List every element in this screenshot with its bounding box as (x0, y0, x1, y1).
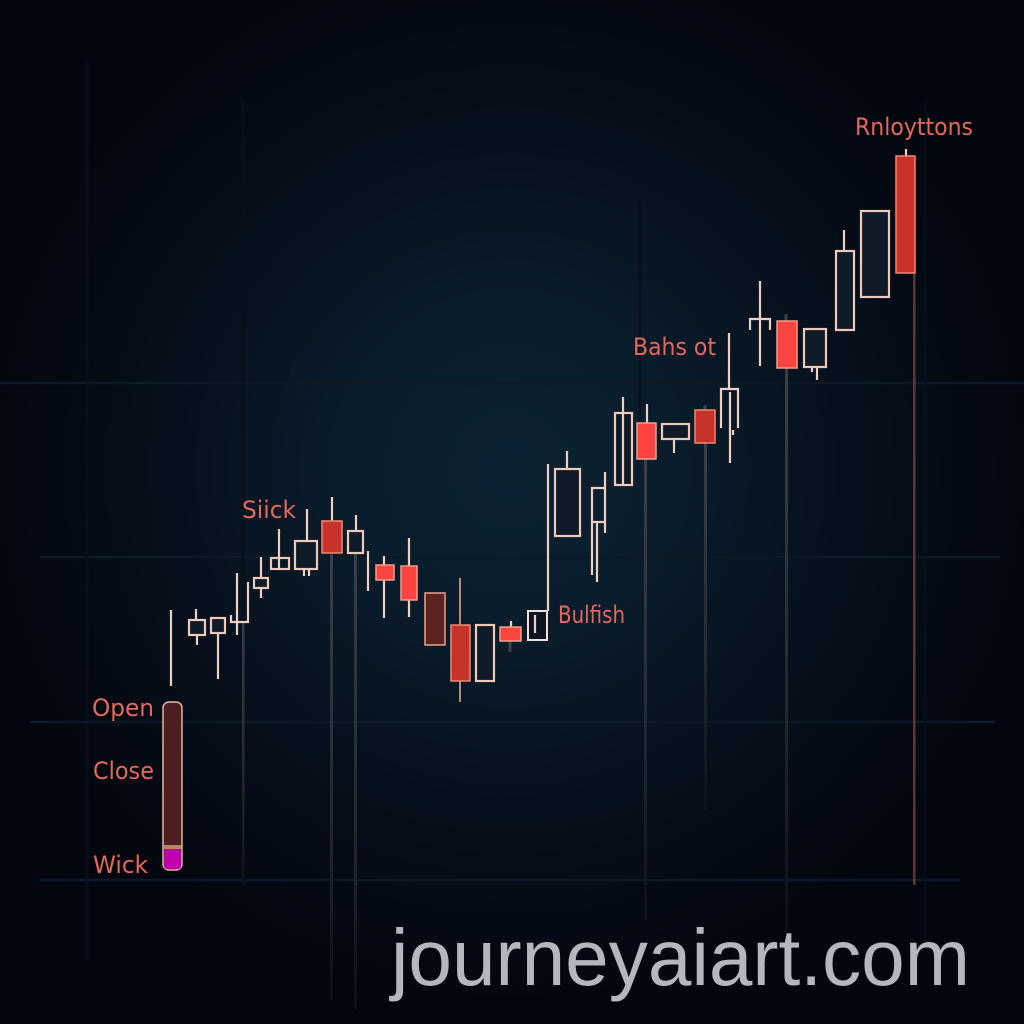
label: Open: Open (92, 694, 154, 722)
candlestick series (171, 149, 915, 702)
label: Bulfish: Bulfish (558, 601, 625, 629)
watermark: journeyaiart.com (389, 913, 970, 1002)
label: Rnloyttons: Rnloyttons (855, 113, 973, 141)
long fading wicks (242, 273, 916, 1010)
label: Wick: Wick (93, 851, 148, 879)
legend candle (163, 702, 182, 870)
candle group: final rally (750, 149, 915, 380)
label: Close: Close (93, 757, 154, 785)
label: Siick: Siick (242, 496, 296, 524)
candle group: pullback (376, 464, 548, 702)
label: Bahs ot: Bahs ot (633, 333, 716, 361)
candle group: early rise (171, 497, 368, 686)
candle group: mid rise (555, 333, 738, 582)
